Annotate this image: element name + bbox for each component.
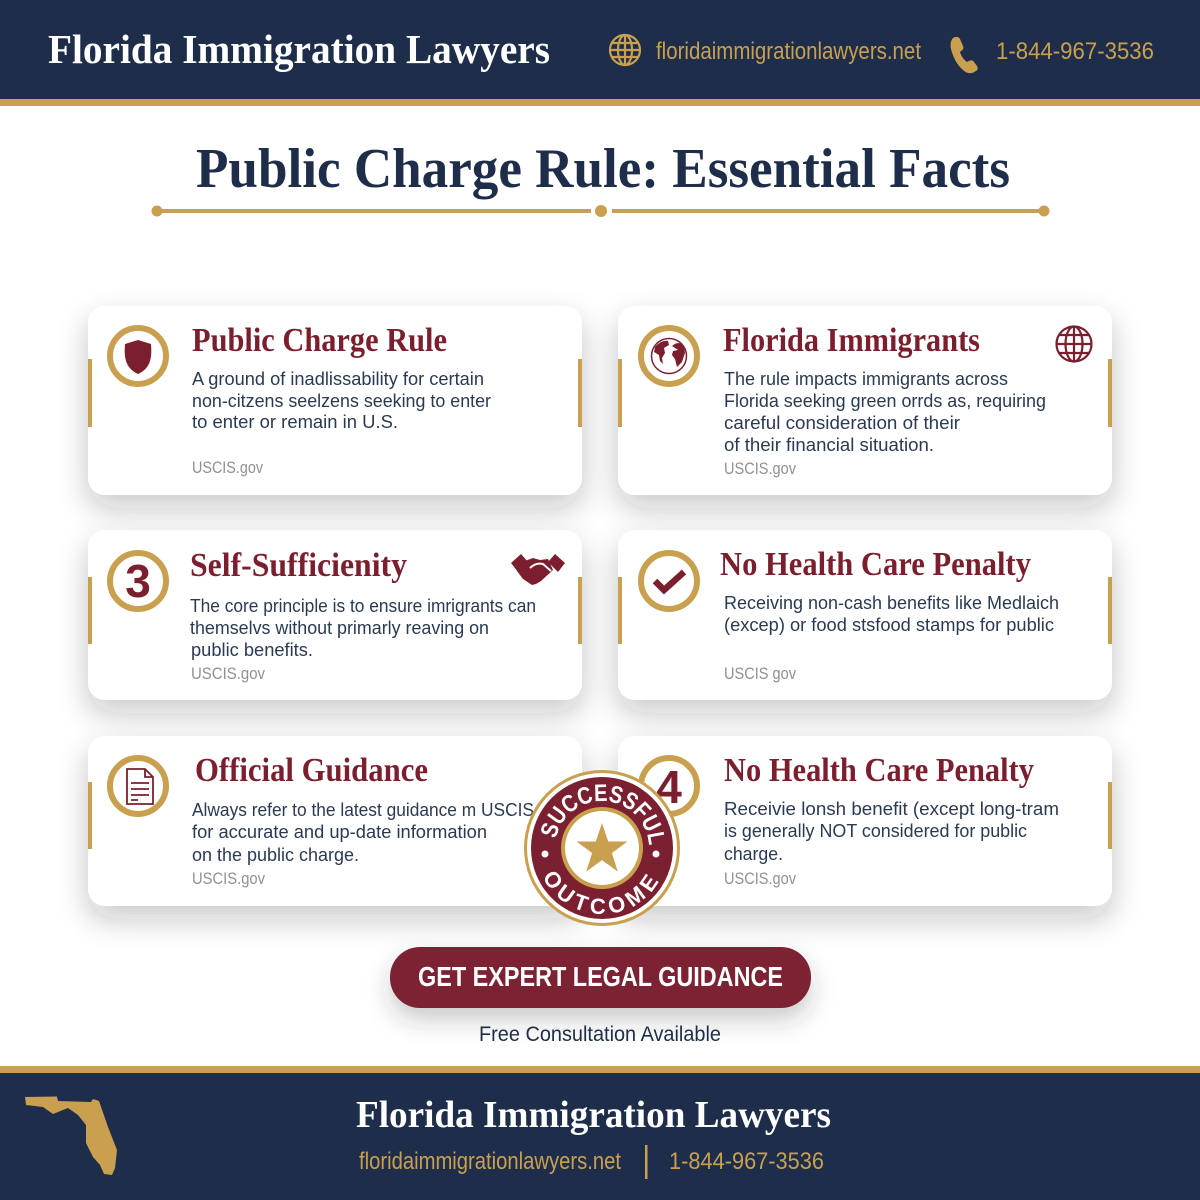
header website: floridaimmigrationlawyers.net (656, 38, 921, 65)
card body: A ground of inadlissability for certain (192, 368, 484, 389)
seal top text: SUCCESSFUL (541, 784, 664, 845)
title divider (152, 205, 1050, 217)
card heading: No Health Care Penalty (724, 752, 1034, 789)
card source: USCIS.gov (192, 459, 264, 477)
panel: self-sufficiency (88, 530, 582, 700)
card body (724, 798, 1059, 864)
icon: florida map (25, 1096, 117, 1175)
seal side dots (542, 850, 660, 858)
panel: no health care penalty (upper) (618, 530, 1112, 700)
card heading: No Health Care Penalty (720, 546, 1031, 583)
card body: non-citzens seelzens seeking to enter (192, 390, 491, 411)
icon: globe outline (1056, 326, 1092, 362)
card body: of their financial situation. (724, 434, 934, 455)
panel: no health care penalty (lower) (618, 736, 1112, 906)
card heading: Florida Immigrants (723, 322, 980, 359)
card body: is generally NOT considered for public (724, 820, 1027, 841)
icon: number 4: 4 (656, 761, 682, 813)
card body: Receivie lonsh benefit (except long-tram (724, 798, 1059, 819)
card source: USCIS gov (724, 665, 797, 683)
panel: official guidance (88, 736, 582, 906)
icon: header globe (610, 35, 640, 65)
card source: USCIS.gov (191, 665, 266, 683)
card body: The core principle is to ensure imrigrants can (190, 595, 536, 616)
card source: USCIS.gov (192, 870, 266, 888)
card heading: Official Guidance (195, 752, 428, 789)
card body: Florida seeking green orrds as, requiring (724, 390, 1046, 411)
card body: for accurate and up-date information (192, 821, 487, 842)
panel: public charge rule (88, 306, 582, 495)
seal star (577, 823, 628, 872)
cta label: GET EXPERT LEGAL GUIDANCE (418, 961, 783, 992)
footer band (0, 1066, 1200, 1200)
card body: Receiving non-cash benefits like Medlaich (724, 592, 1059, 613)
badge: successful outcome seal (524, 770, 680, 926)
icon: number 3 (110, 553, 166, 609)
card source: USCIS.gov (724, 460, 797, 478)
icon: phone (951, 37, 978, 73)
footer phone number: 1-844-967-3536 (669, 1148, 824, 1175)
card heading: Public Charge Rule (192, 322, 447, 359)
cta button (390, 947, 811, 1008)
footer firm name: Florida Immigration Lawyers (356, 1094, 831, 1136)
icon: shield (110, 328, 166, 384)
card body: on the public charge. (192, 844, 359, 865)
icon: earth (641, 328, 697, 384)
main title: Public Charge Rule: Essential Facts (196, 138, 1010, 200)
card body: (excep) or food stsfood stamps for public (724, 614, 1054, 635)
card heading: Self-Sufficienity (190, 547, 407, 584)
header firm name: Florida Immigration Lawyers (48, 26, 550, 72)
card source: USCIS.gov (724, 870, 797, 888)
icon: check mark (641, 553, 697, 609)
icon: handshake (511, 554, 565, 585)
card body: careful consideration of their (724, 412, 960, 433)
card body: to enter or remain in U.S. (192, 411, 398, 432)
card body: charge. (724, 843, 783, 864)
footer website: floridaimmigrationlawyers.net (359, 1148, 621, 1175)
card body (192, 799, 534, 865)
header band (0, 0, 1200, 106)
card body (192, 368, 491, 432)
icon: number 4 (641, 758, 697, 814)
card body (724, 368, 1046, 455)
card body (190, 595, 536, 660)
icon: document (110, 758, 166, 814)
card body: public benefits. (191, 639, 313, 660)
header phone number: 1-844-967-3536 (996, 38, 1154, 65)
card body: Always refer to the latest guidance m USCIS (192, 799, 534, 820)
card body (724, 592, 1059, 635)
seal bottom text: OUTCOME (545, 872, 659, 914)
cta subtext: Free Consultation Available (479, 1023, 721, 1046)
card body: themselvs without primarly reaving on (190, 617, 489, 638)
card body: The rule impacts immigrants across (724, 368, 1008, 389)
panel: florida immigrants (618, 306, 1112, 495)
icon: number 3: 3 (125, 555, 151, 607)
